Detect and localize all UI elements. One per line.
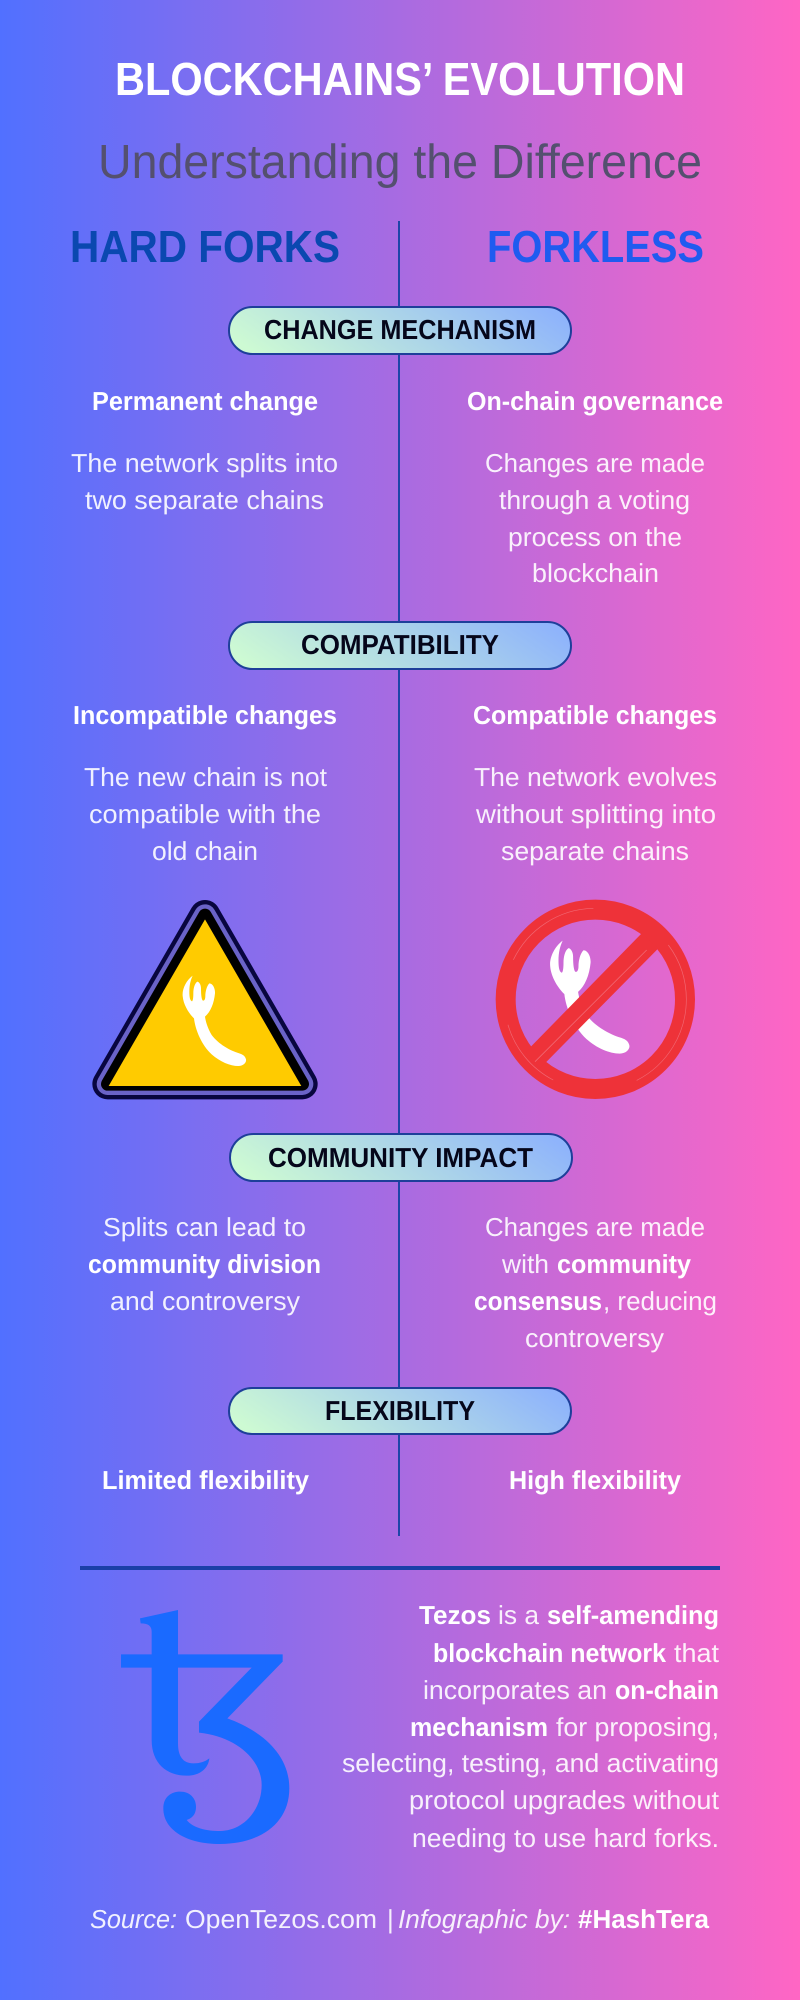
text block: about Tezos: blockchain network	[433, 1638, 667, 1668]
hard forks: incompatible changes: Incompatible changes	[73, 700, 337, 730]
pill: compatibility	[229, 622, 571, 669]
hard forks: permanent change: Permanent change	[92, 386, 318, 416]
source credit: |	[387, 1904, 394, 1934]
pill: compatibility: COMPATIBILITY	[301, 629, 499, 660]
forkless description: Changes are made	[485, 448, 705, 478]
hard forks description: two separate chains	[85, 485, 324, 515]
hard forks description: and controversy	[110, 1286, 300, 1316]
text block: about Tezos	[342, 1600, 720, 1853]
text block: about Tezos: is a	[498, 1600, 540, 1630]
text block: about Tezos: selecting, testing, and activating	[342, 1748, 719, 1778]
hard forks description	[84, 762, 328, 866]
hard forks description	[88, 1212, 321, 1316]
text block: about Tezos: for proposing,	[556, 1712, 719, 1742]
pill: change mechanism: CHANGE MECHANISM	[264, 314, 536, 345]
forkless description	[485, 448, 705, 588]
hard forks description: The network splits into	[71, 448, 338, 478]
pill: flexibility: FLEXIBILITY	[325, 1395, 475, 1426]
icon: warning triangle with fork	[108, 915, 302, 1086]
section: change mechanism	[71, 307, 723, 588]
icon: Tezos logo	[121, 1610, 289, 1844]
section: compatibility	[73, 622, 717, 866]
text block: about Tezos: self-amending	[547, 1600, 719, 1630]
text block: about Tezos: incorporates an	[423, 1675, 607, 1705]
text block: about Tezos: mechanism	[410, 1712, 548, 1742]
hard forks description	[71, 448, 338, 515]
hard forks description: old chain	[152, 836, 258, 866]
text block: about Tezos: Tezos	[419, 1600, 491, 1630]
section: community impact	[88, 1134, 717, 1353]
hard forks description: Splits can lead to	[103, 1212, 306, 1242]
forkless description: The network evolves	[474, 762, 717, 792]
source credit: Infographic by:	[398, 1904, 570, 1934]
hard forks description: The new chain is not	[84, 762, 328, 792]
forkless description	[474, 762, 717, 866]
forkless description: controversy	[525, 1323, 664, 1353]
hard forks: limited flexibility: Limited flexibility	[102, 1465, 310, 1495]
source credit: Source:	[90, 1904, 177, 1934]
forkless: on-chain governance: On-chain governance	[467, 386, 723, 416]
hard forks description: community division	[88, 1249, 321, 1279]
section: flexibility	[102, 1388, 682, 1495]
forkless description: without splitting into	[475, 799, 716, 829]
pill: community impact: COMMUNITY IMPACT	[268, 1142, 533, 1173]
center divider line	[398, 221, 400, 1536]
forkless description: Changes are made	[485, 1212, 705, 1242]
source credit: #HashTera	[578, 1904, 710, 1934]
hard forks description: compatible with the	[89, 799, 321, 829]
text block: about Tezos: that	[674, 1638, 720, 1668]
column heading: hard forks: HARD FORKS	[70, 221, 340, 272]
forkless description	[474, 1212, 717, 1353]
forkless: high flexibility: High flexibility	[509, 1465, 682, 1495]
text block: about Tezos: protocol upgrades without	[409, 1785, 720, 1815]
text block: about Tezos: needing to use hard forks.	[412, 1823, 719, 1853]
source credit	[90, 1904, 710, 1934]
forkless description: consensus	[474, 1286, 602, 1316]
pill: flexibility	[229, 1388, 571, 1434]
subtitle: Understanding the Difference	[98, 136, 702, 189]
footer divider	[80, 1566, 720, 1570]
forkless description: community	[557, 1249, 692, 1279]
source credit: OpenTezos.com	[185, 1904, 377, 1934]
column heading: forkless: FORKLESS	[487, 221, 704, 272]
pill: community impact	[230, 1134, 572, 1181]
forkless description: process on the	[508, 522, 682, 552]
text block: about Tezos: on-chain	[615, 1675, 719, 1705]
forkless description: blockchain	[532, 558, 659, 588]
forkless description: with	[501, 1249, 549, 1279]
forkless description: , reducing	[603, 1286, 717, 1316]
icon: prohibited fork	[504, 908, 686, 1090]
forkless description: through a voting	[499, 485, 690, 515]
forkless: compatible changes: Compatible changes	[473, 700, 717, 730]
pill: change mechanism	[229, 307, 571, 354]
title: BLOCKCHAINS’ EVOLUTION	[115, 53, 685, 105]
forkless description: separate chains	[501, 836, 689, 866]
